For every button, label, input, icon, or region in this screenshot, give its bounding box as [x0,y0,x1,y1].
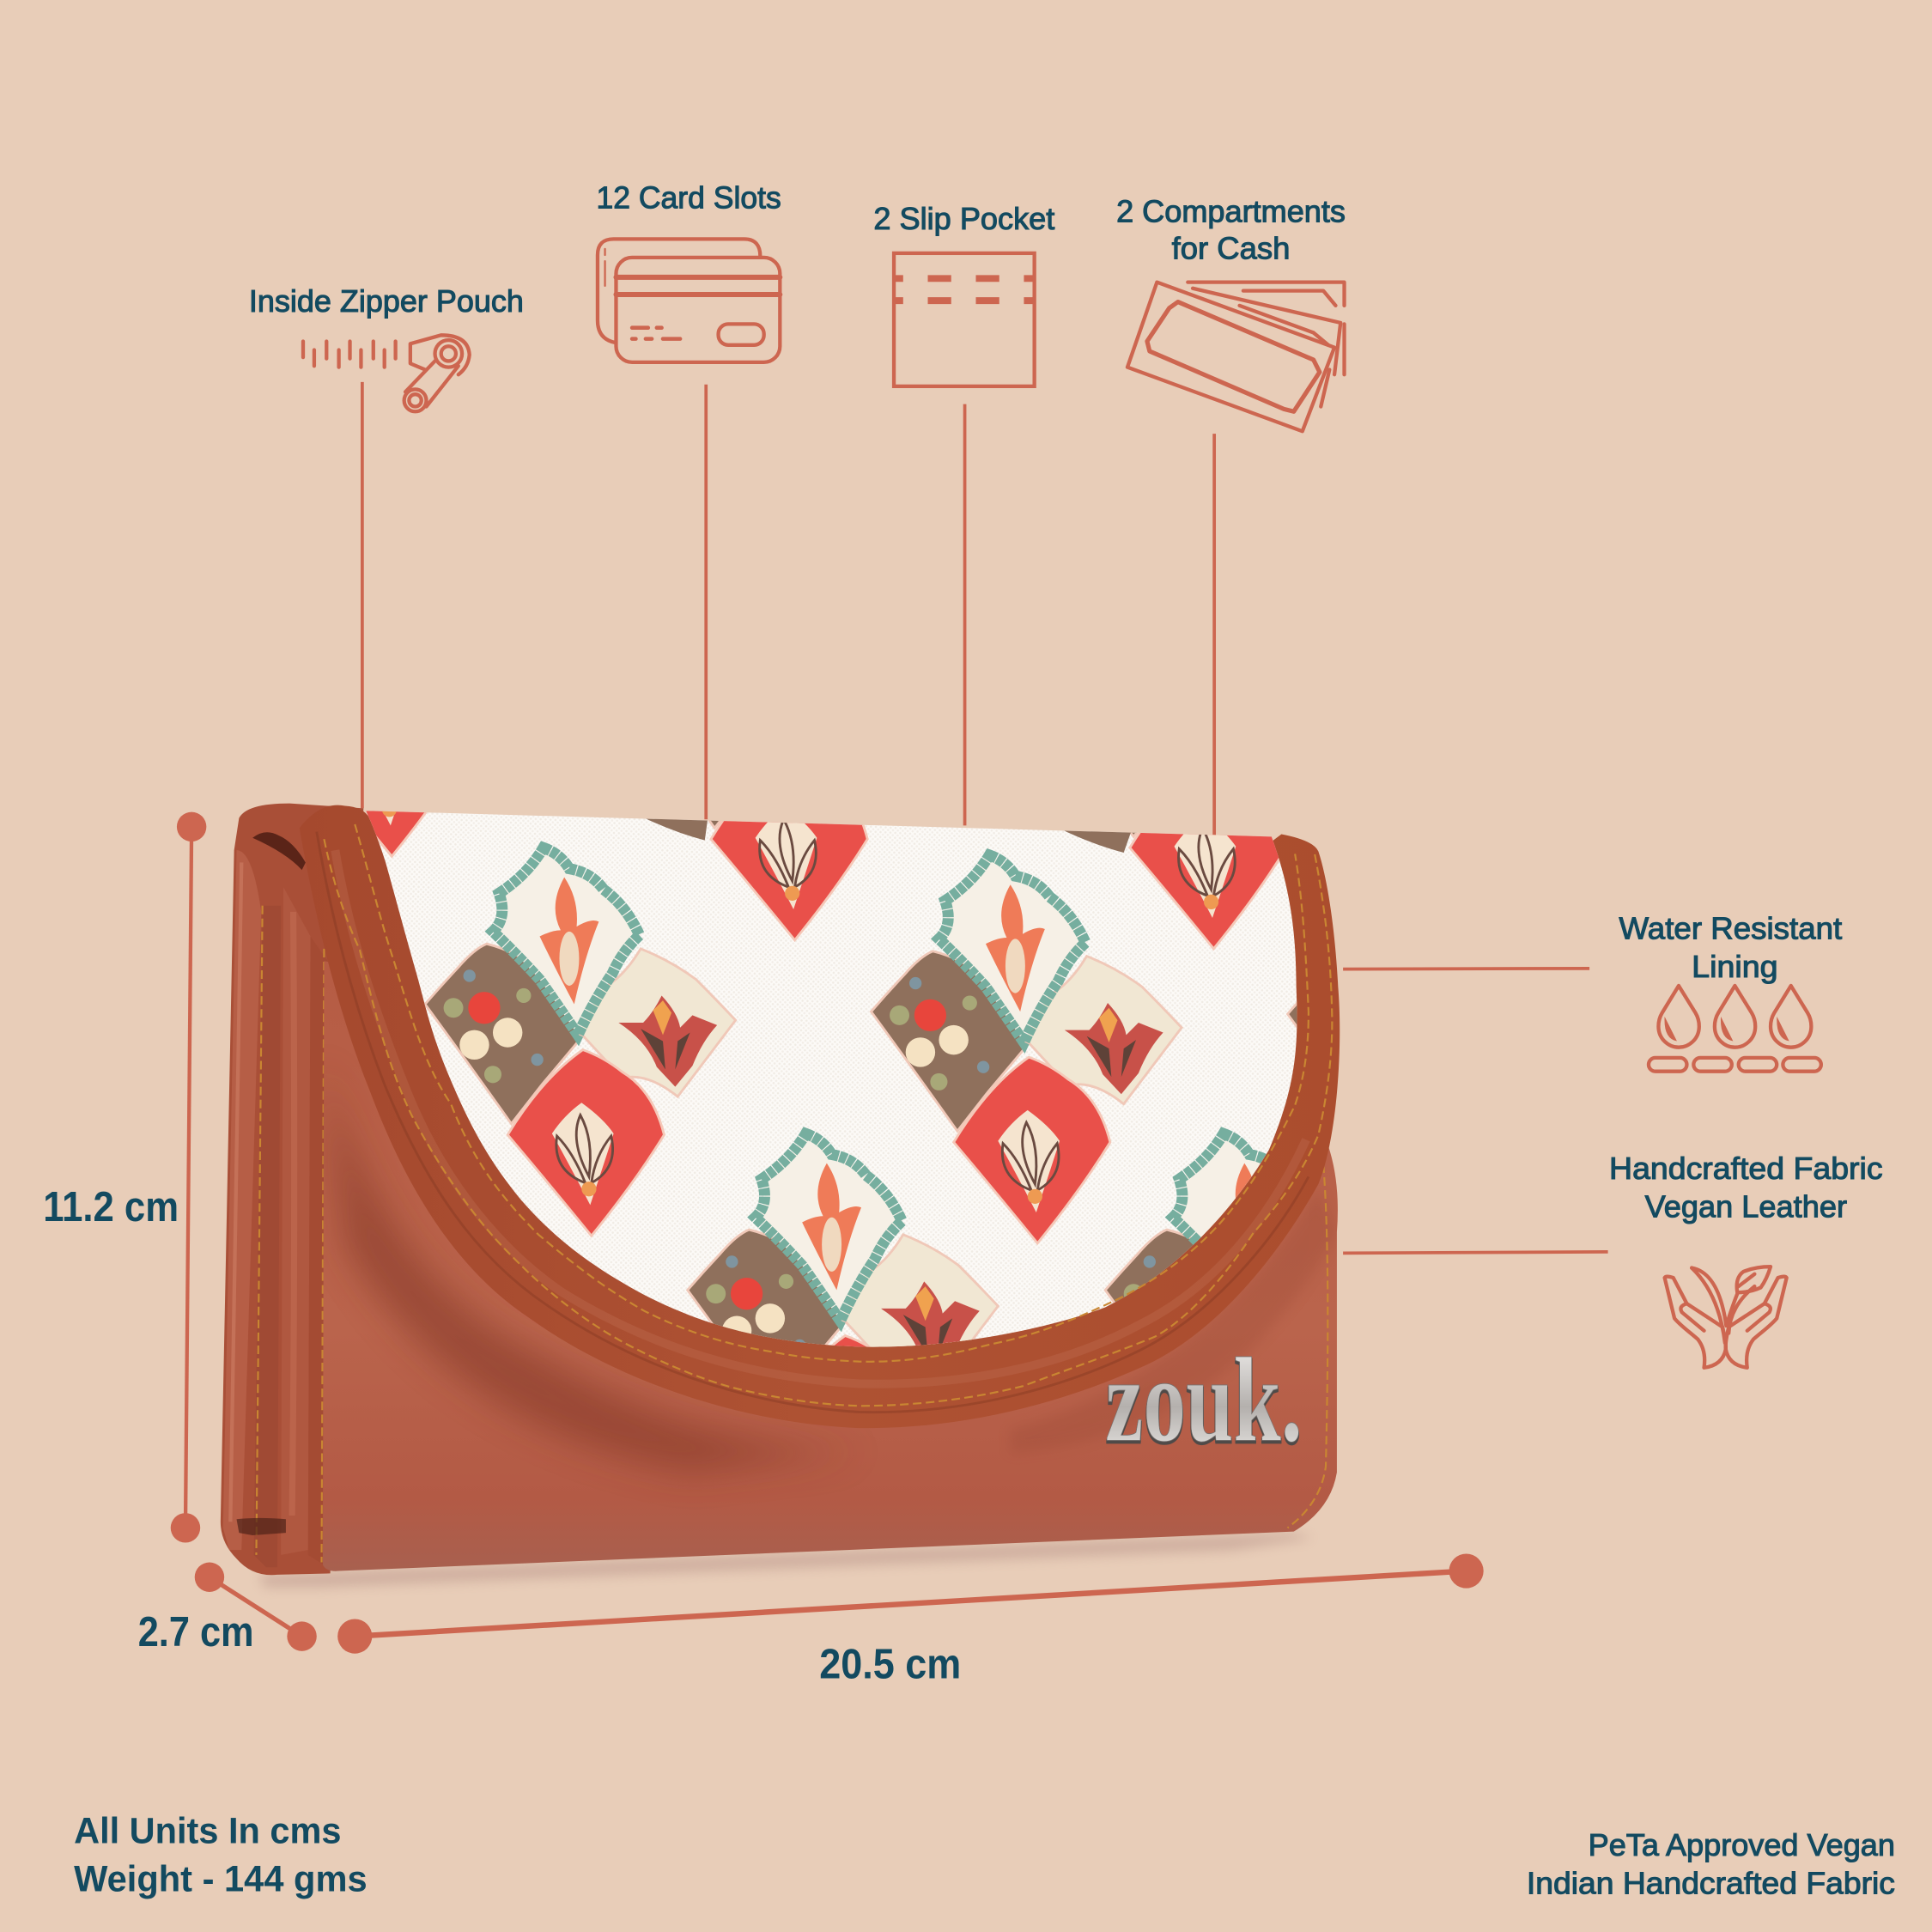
icon: zipper [303,335,470,411]
title: water resistant label [1619,911,1842,984]
wallet gusset [221,804,363,1575]
flap shadow on panel [323,1060,1337,1473]
dimension: depth 2.7 cm: 2.7 cm [138,1609,254,1656]
flap leather binding [300,805,1340,1428]
leader line: card slots [705,385,708,819]
leader line: zipper pouch [361,382,363,808]
leader line: compartments [1213,434,1215,835]
icon: cash notes [1127,283,1345,431]
icon: water drops and lining [1649,986,1821,1072]
note: peta approved: Indian Handcrafted Fabric [1527,1867,1895,1901]
icon: slip pocket [893,253,1035,386]
title: water resistant label: Lining [1692,950,1778,984]
dimension: height 11.2 cm: 11.2 cm [43,1184,179,1230]
wallet front panel [323,961,1338,1571]
fabric panel [366,811,1297,1347]
title: water resistant label: Water Resistant [1619,911,1842,945]
leader line: handcrafted fabric [1343,1252,1608,1253]
icon: hands holding leaves [1665,1267,1787,1368]
logo: zouk: zouk. [1105,1336,1303,1469]
right edge stitching [1288,1164,1327,1528]
note: peta approved [1527,1828,1895,1901]
dimension: height 11.2 cm [43,812,206,1543]
note: units and weight: Weight - 144 gms [74,1859,368,1900]
note: units and weight [74,1811,368,1900]
flap stitching inner [355,824,1309,1362]
title: slip pocket label: 2 Slip Pocket [873,202,1054,236]
logo: zouk: zouk. [1105,1334,1303,1467]
note: peta approved: PeTa Approved Vegan [1589,1828,1895,1862]
title: handcrafted fabric label: Vegan Leather [1645,1190,1847,1224]
flap piping shadow line [317,832,1309,1413]
title: compartments label: for Cash [1172,231,1290,265]
flap stitching outer [324,839,1332,1406]
note: units and weight: All Units In cms [74,1811,341,1852]
icon: credit cards [598,239,780,362]
title: compartments label: 2 Compartments [1116,194,1346,228]
flap highlight [335,850,1306,1384]
title: card slots label: 12 Card Slots [597,181,781,216]
dimension: width 20.5 cm [337,1553,1484,1687]
title: handcrafted fabric label [1609,1151,1883,1224]
leader line: slip pocket [963,404,966,825]
leader line: water resistant [1343,968,1589,970]
title: handcrafted fabric label: Handcrafted Fabric [1609,1151,1883,1186]
ground shadow [258,1533,1314,1587]
title: inside zipper pouch label: Inside Zipper Pouch [249,284,524,319]
title: compartments label [1116,194,1346,265]
logo: zouk [1105,1334,1303,1469]
dimension: width 20.5 cm: 20.5 cm [819,1641,961,1687]
fabric print motifs [366,811,1297,1347]
wallet photo [170,804,1813,1643]
dimension: depth 2.7 cm [138,1563,317,1656]
